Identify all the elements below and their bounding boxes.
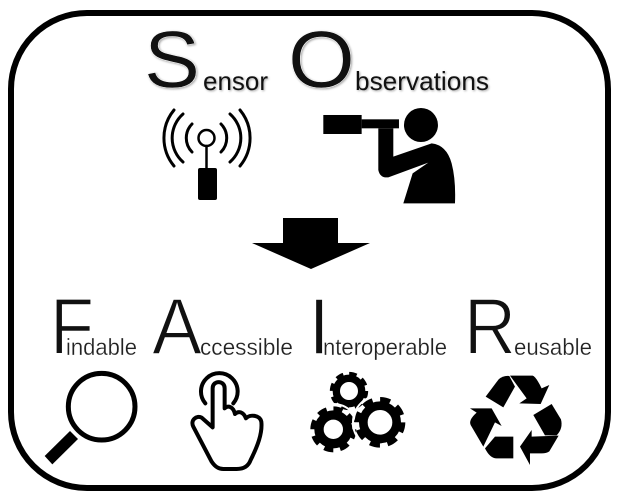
heading: Findable: indable <box>66 334 137 360</box>
heading: Accessible: ccessible <box>200 334 293 360</box>
arrow: down <box>252 218 370 269</box>
icon: gears <box>308 374 407 455</box>
gear: right <box>353 395 407 449</box>
heading: Findable: F <box>50 282 94 371</box>
gear: top <box>332 374 366 408</box>
heading: Interoperable: I <box>308 282 330 371</box>
heading: Reusable: R <box>464 282 516 371</box>
icon: recycling symbol <box>470 376 562 465</box>
icon: person with telescope <box>323 108 455 203</box>
heading: Interoperable: nteroperable <box>323 334 447 360</box>
heading: Reusable: eusable <box>514 334 592 360</box>
icon: pointing hand <box>192 373 262 469</box>
title: Sensor Observations: bservations <box>355 66 489 96</box>
heading: Interoperable <box>308 282 447 371</box>
title: Sensor Observations <box>144 15 489 105</box>
title: Sensor Observations: ensor <box>203 66 268 96</box>
gear: left <box>308 404 359 455</box>
heading: Accessible: A <box>152 282 203 371</box>
icon: magnifying glass <box>45 373 135 464</box>
heading: Reusable <box>464 282 592 371</box>
title: Sensor Observations: O <box>288 15 355 105</box>
heading: Accessible <box>152 282 293 371</box>
icon: wireless sensor <box>164 110 250 200</box>
heading: Findable <box>50 282 137 371</box>
title: Sensor Observations: S <box>144 15 200 105</box>
